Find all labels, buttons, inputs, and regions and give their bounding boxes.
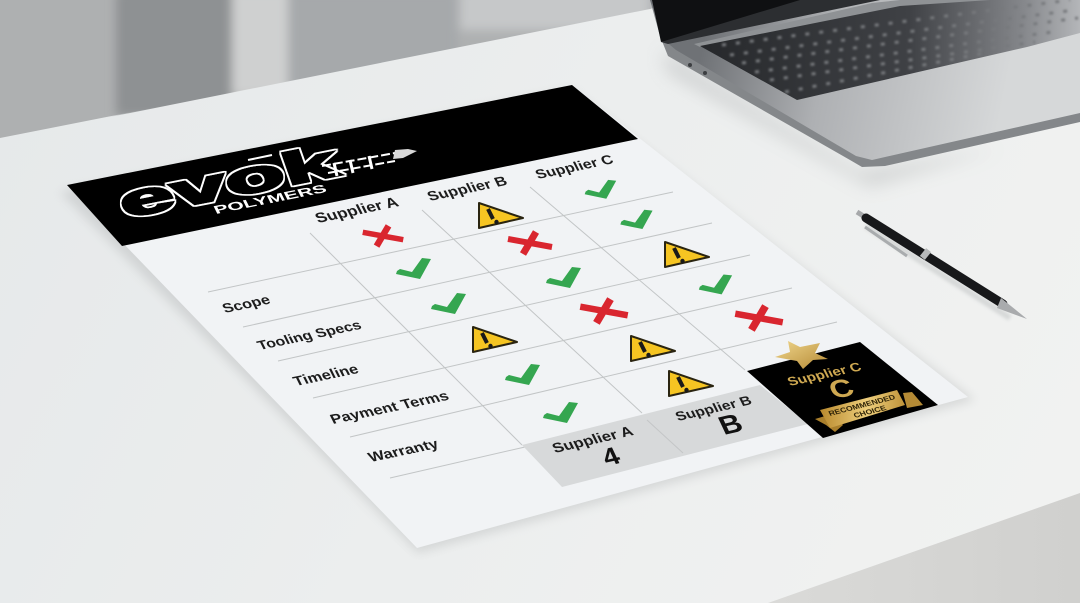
icon: gold star <box>775 341 828 369</box>
rating icons <box>363 180 783 423</box>
icon: check <box>699 274 732 294</box>
icon: cross <box>363 226 403 246</box>
icon: cross <box>735 306 783 330</box>
pen <box>857 212 1027 319</box>
Supplier A score: Supplier A <box>550 424 636 456</box>
blurred background room <box>0 0 1080 300</box>
recommended panel: Supplier C <box>747 342 938 438</box>
logo: evok polymers: evok <box>111 136 345 227</box>
column header: Supplier C: Supplier C <box>533 153 617 182</box>
Supplier C heading: Supplier C <box>785 359 864 388</box>
icon: warning <box>631 336 675 361</box>
ribbon: recommended choice <box>815 390 923 432</box>
icon: check <box>620 210 653 229</box>
Supplier B score: Supplier B <box>673 394 755 424</box>
column header: Supplier A: Supplier A <box>313 195 402 226</box>
icon: check <box>543 402 578 423</box>
icon: check <box>546 267 581 288</box>
icon: warning <box>479 203 523 228</box>
comparison grid lines <box>208 187 837 478</box>
icon: check <box>431 293 466 314</box>
row label: Warranty: Warranty <box>366 437 442 465</box>
icon: warning <box>473 327 517 352</box>
row label: Tooling Specs: Tooling Specs <box>255 318 364 353</box>
icon: cross <box>580 299 628 323</box>
icon: warning <box>665 242 709 267</box>
row label: Timeline: Timeline <box>291 362 361 389</box>
paper sheet <box>67 85 968 548</box>
desk front edge <box>768 493 1080 603</box>
logo: evok polymers: POLYMERS <box>211 182 329 217</box>
icon: warning <box>669 371 713 396</box>
ribbon: recommended choice: CHOICE <box>852 404 888 420</box>
paper shadow <box>60 90 975 553</box>
icon: check <box>505 364 540 385</box>
icon: check <box>585 180 616 199</box>
summary: Supplier A and B grey panel <box>522 385 808 487</box>
grade 4: 4 <box>597 442 625 471</box>
row label: Scope: Scope <box>220 293 273 316</box>
grade B: B <box>714 409 748 441</box>
icon: cross <box>508 232 552 254</box>
row label: Payment Terms: Payment Terms <box>328 389 452 427</box>
laptop <box>650 0 1080 186</box>
column header: Supplier B: Supplier B <box>425 174 510 204</box>
grade C: C <box>824 374 859 405</box>
ribbon: recommended choice: RECOMMENDED <box>827 393 897 418</box>
header band with logo <box>67 85 638 246</box>
icon: check <box>396 258 431 279</box>
